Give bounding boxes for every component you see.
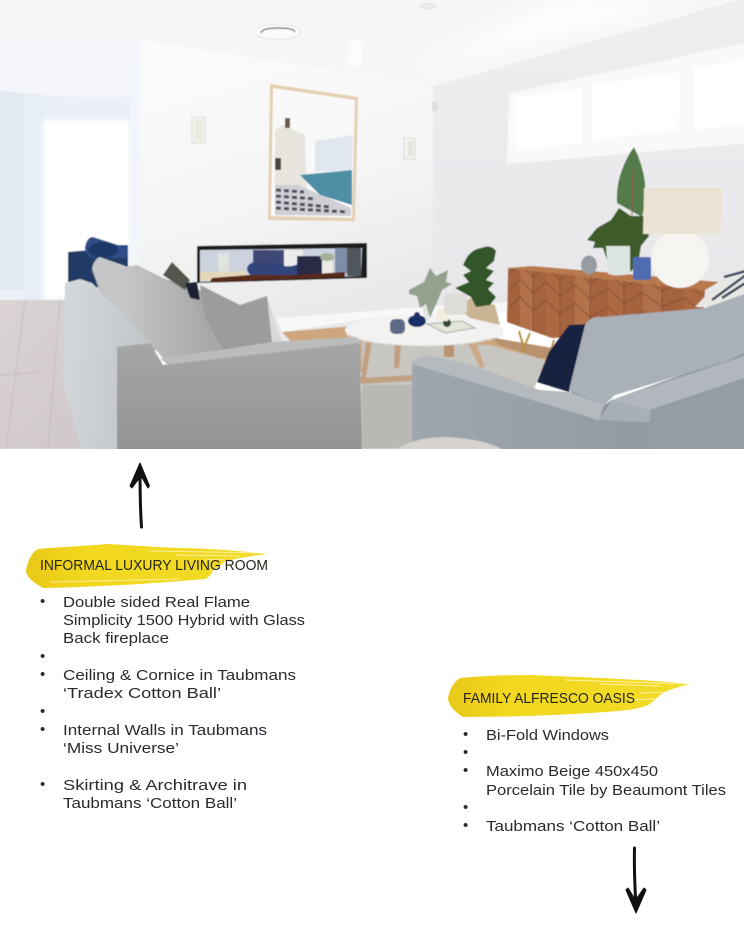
bullet list — [40, 593, 305, 812]
window frame — [507, 42, 744, 164]
bullet list: • — [40, 666, 45, 683]
right sofa — [412, 292, 744, 455]
left room through doorway — [0, 36, 140, 306]
sofa backing — [92, 267, 282, 350]
bullet list: Double sided Real Flame — [63, 594, 250, 611]
bullet list: ‘Tradex Cotton Ball’ — [63, 685, 221, 702]
navy cushion — [537, 324, 590, 392]
bullet list — [463, 726, 726, 835]
navy cushion — [185, 282, 200, 300]
bullet list: Bi-Fold Windows — [486, 727, 609, 744]
brush highlight — [26, 544, 267, 588]
bullet list: • — [40, 648, 45, 665]
bullet list: • — [40, 593, 45, 610]
wall sconce left — [192, 117, 205, 143]
big back cushion — [120, 265, 222, 358]
brush streaks — [50, 551, 266, 582]
blue sofa behind — [68, 237, 128, 290]
arrow down — [626, 848, 646, 913]
bullet list: • — [40, 776, 45, 793]
door reveal — [130, 40, 140, 268]
skirting — [277, 302, 508, 332]
ottoman edge — [392, 437, 507, 452]
ceiling highlight — [410, 0, 700, 72]
heading: FAMILY ALFRESCO OASIS — [463, 690, 635, 707]
table items — [390, 306, 475, 334]
ceiling downlight — [421, 4, 435, 8]
sofa backing — [569, 350, 744, 422]
dark cushion — [163, 262, 190, 290]
striped cushion — [695, 266, 744, 307]
ceiling pendant — [347, 40, 363, 66]
window pane 3 — [694, 59, 744, 130]
leaf stem — [631, 170, 633, 222]
bullet list: • — [463, 726, 468, 743]
glass vase — [606, 246, 630, 276]
rug pattern — [362, 385, 412, 449]
bullet list: Skirting & Architrave in — [63, 777, 247, 794]
left sofa — [63, 257, 362, 455]
lamp shade — [643, 188, 722, 234]
back cushion — [569, 292, 744, 405]
wall sconce right — [404, 138, 415, 159]
seat top edge — [160, 337, 362, 367]
fireplace — [197, 243, 367, 283]
timber floor left — [0, 300, 82, 449]
arm top — [412, 355, 604, 420]
rear pale cushion — [240, 296, 282, 348]
bullet list: Back fireplace — [63, 630, 169, 647]
bullet list: ‘Miss Universe’ — [63, 740, 179, 757]
bullet list: Porcelain Tile by Beaumont Tiles — [486, 782, 726, 799]
right arm body — [649, 376, 744, 455]
front panel — [117, 343, 362, 455]
timber sideboard — [505, 260, 719, 352]
window pane 1 — [515, 88, 582, 150]
table foliage — [409, 268, 452, 318]
bullet list: • — [463, 799, 468, 816]
photo: living room — [0, 0, 744, 455]
timber floor back — [282, 326, 560, 372]
bullet list: • — [463, 762, 468, 779]
right arm top — [612, 354, 744, 410]
bullet list: • — [463, 817, 468, 834]
timber floor by sideboard — [489, 337, 552, 358]
ceiling vent — [255, 24, 301, 40]
small vase — [581, 256, 597, 274]
brush streaks — [565, 680, 688, 700]
bullet list: Taubmans ‘Cotton Ball’ — [486, 818, 660, 835]
blue ginger jar — [633, 257, 651, 280]
bullet list: Ceiling & Cornice in Taubmans — [63, 667, 296, 684]
back cushion left — [92, 257, 128, 312]
heading: INFORMAL LUXURY LIVING ROOM — [40, 557, 268, 574]
framed art — [268, 84, 358, 221]
rug — [360, 342, 545, 449]
large leaf — [617, 147, 645, 217]
panel: family alfresco oasis — [448, 675, 726, 835]
sofa body — [412, 362, 650, 455]
brush highlight — [448, 675, 690, 717]
bullet list: Maximo Beige 450x450 — [486, 763, 658, 780]
grey cushion — [200, 285, 272, 350]
panel: informal luxury living room — [26, 544, 305, 812]
right wall — [433, 0, 744, 312]
fiddle plant — [455, 247, 496, 307]
bullet list: Taubmans ‘Cotton Ball’ — [63, 795, 237, 812]
bullet list: • — [40, 721, 45, 738]
coffee table — [345, 314, 503, 384]
bullet list: • — [463, 744, 468, 761]
leafy bouquet — [587, 208, 649, 272]
basket — [460, 298, 500, 325]
arm front — [599, 400, 650, 422]
bullet list: • — [40, 703, 45, 720]
side arm — [63, 279, 152, 455]
bullet list: Internal Walls in Taubmans — [63, 722, 267, 739]
bullet list: Simplicity 1500 Hybrid with Glass — [63, 612, 305, 629]
grey pot — [444, 293, 467, 315]
main wall — [140, 94, 433, 342]
arrow up — [130, 463, 150, 527]
wall sensor — [432, 102, 437, 111]
lamp base — [651, 230, 709, 288]
window pane 2 — [592, 72, 680, 140]
ceiling — [0, 0, 744, 86]
